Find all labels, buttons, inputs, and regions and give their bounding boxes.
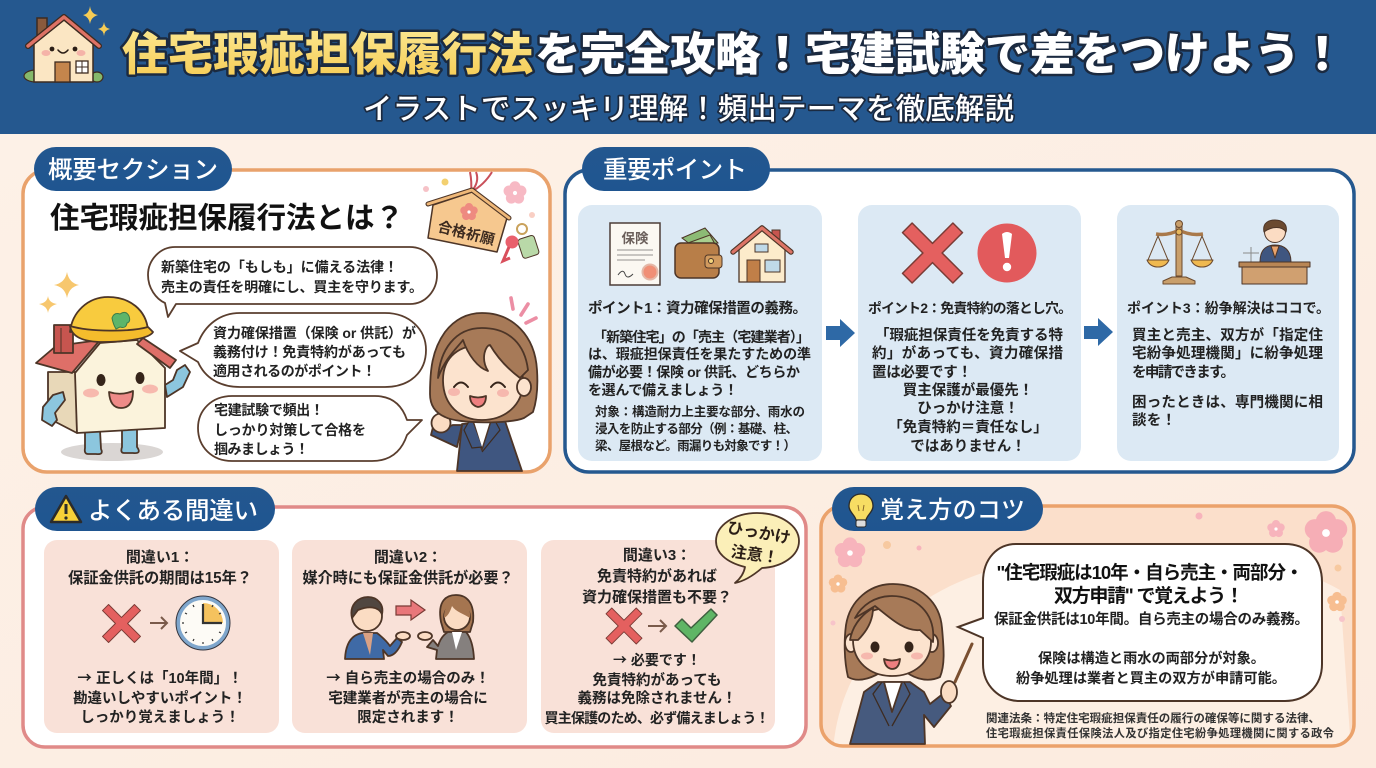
bubble 2: 資力確保措置（保険 or 供託）が [213, 325, 416, 341]
icon: cross to clock [102, 596, 230, 650]
point 3 text: 談を！ [1132, 411, 1176, 429]
speech bubble: 保険は構造と雨水の両部分が対象。 [1038, 650, 1265, 667]
card: mistake 3: 免責特約があれば [597, 567, 717, 585]
bubble 1: 新築住宅の「もしも」に備える法律！ [161, 259, 398, 275]
bubble 3: しっかり対策して合格を [214, 422, 366, 438]
card: mistake 3: 義務は免除されません！ [577, 689, 737, 707]
icon: cross to check [606, 608, 717, 644]
bubble 3: 掴みましょう！ [214, 441, 309, 457]
key points badge: 重要ポイント [603, 156, 747, 184]
card: mistake 1: 保証金供託の期間は15年？ [68, 569, 252, 587]
title: を完全攻略！宅建試験で差をつけよう！ [535, 29, 1345, 80]
character: smiling woman [430, 298, 537, 471]
card: mistake 1: 勘違いしやすいポイント！ [73, 689, 247, 707]
speech bubble: "住宅瑕疵は10年・自ら売主・両部分・ [996, 562, 1304, 583]
point 3 text: 買主と売主、双方が「指定住 [1132, 326, 1324, 344]
card: mistake 3: 買主保護のため、必ず備えましょう！ [544, 710, 770, 726]
related laws note: 住宅瑕疵担保責任保険法人及び指定住宅紛争処理機関に関する政令 [986, 726, 1334, 740]
title: 住宅瑕疵担保履行法 [122, 29, 533, 80]
point 1 text: 備が必要！保険 or 供託、どちらか [588, 364, 800, 380]
icon: scales [1147, 220, 1213, 284]
arrow: point 2 to 3 [1084, 318, 1113, 346]
icon: exclamation [978, 224, 1036, 282]
point 2 text: 「免責特約＝責任なし」 [888, 418, 1048, 436]
panel: key points [565, 147, 1354, 472]
bubble 2: 義務付け！免責特約があっても [213, 344, 406, 360]
character: teacher with pointer [845, 584, 972, 744]
icon: house [733, 228, 791, 282]
card: mistake 2 [292, 540, 527, 733]
overview badge [34, 147, 232, 191]
bubble 1 [148, 247, 437, 317]
point 3 text: ポイント3：紛争解決はココで。 [1127, 300, 1330, 316]
card: mistake 1 [44, 540, 279, 733]
point 1 text: ポイント1：資力確保措置の義務。 [588, 299, 807, 317]
subtitle: イラストでスッキリ理解！頻出テーマを徹底解説 [363, 93, 1014, 126]
related laws note [986, 711, 1334, 740]
point 1 text: 「新築住宅」の「売主（宅建業者）」 [593, 329, 810, 345]
icon: ema wooden plaque [423, 172, 540, 261]
point 3 text [1127, 300, 1330, 429]
callout: tricky note [716, 513, 799, 583]
point 3 text: を申請できます。 [1132, 364, 1235, 381]
bubble 2 [180, 313, 426, 387]
point 1 text: 対象：構造耐力上主要な部分、雨水の [595, 404, 805, 419]
icon: ema wooden plaque: 合格祈願 [436, 217, 497, 249]
point 2 text: 買主保護が最優先！ [903, 381, 1033, 399]
point 1 text: を選んで備えましょう！ [588, 382, 738, 398]
point 2 text: ポイント2：免責特約の落とし穴。 [868, 300, 1072, 316]
point 2 text [868, 300, 1072, 455]
card: mistake 1: → 正しくは「10年間」！ [77, 667, 243, 688]
panel: common mistakes [23, 487, 806, 747]
key points badge [582, 147, 770, 191]
card: point 3 [1117, 205, 1339, 461]
card: mistake 3 [541, 540, 775, 733]
bubble 1: 売主の責任を明確にし、買主を守ります。 [161, 279, 423, 295]
header band [0, 0, 1376, 134]
overview badge: 概要セクション [48, 156, 218, 184]
point 1 text: 梁、屋根など。雨漏りも対象です！） [595, 438, 796, 453]
mistakes badge: よくある間違い [88, 497, 258, 525]
icon: light bulb [849, 494, 873, 527]
icon: agent and client with arrow [345, 595, 474, 659]
card: mistake 3: 免責特約があっても [592, 671, 722, 689]
bubble 3 [198, 396, 422, 461]
memory tips badge [832, 487, 1043, 531]
point 2 text: ではありません！ [910, 438, 1026, 455]
card: mistake 2: 媒介時にも保証金供託が必要？ [302, 569, 514, 587]
card: mistake 3: → 必要です！ [613, 650, 701, 670]
bubble 2: 適用されるのがポイント！ [213, 363, 376, 379]
card: point 1 [578, 205, 822, 461]
character: house with helmet [36, 272, 190, 461]
card: mistake 2: → 自ら売主の場合のみ！ [326, 667, 490, 688]
callout: tricky note: 注意！ [730, 543, 780, 567]
overview heading: 住宅瑕疵担保履行法とは？ [50, 202, 404, 235]
card: mistake 3: 間違い3： [623, 546, 691, 564]
icon: insurance document [610, 223, 660, 285]
related laws note: 関連法条：特定住宅瑕疵担保責任の履行の確保等に関する法律、 [986, 711, 1320, 725]
panel: memory tips [821, 487, 1354, 750]
point 2 text: 置は必要です！ [872, 363, 972, 381]
card: point 2 [858, 205, 1081, 461]
memory tips badge: 覚え方のコツ [880, 497, 1025, 524]
point 2 text: ひっかけ注意！ [917, 399, 1019, 417]
decoration: cherry blossoms [829, 511, 1347, 626]
mistakes badge [35, 487, 275, 531]
card: mistake 2: 宅建業者が売主の場合に [328, 689, 488, 707]
icon: smiling house [24, 6, 110, 82]
callout: tricky note: ひっかけ [726, 519, 792, 547]
card: mistake 2: 限定されます！ [357, 709, 459, 726]
arrow: point 1 to 2 [826, 319, 855, 347]
icon: wallet [675, 228, 722, 278]
icon: warning triangle [51, 496, 81, 522]
bubble 3: 宅建試験で頻出！ [214, 402, 324, 418]
card: mistake 1: しっかり覚えましょう！ [80, 709, 240, 726]
icon: cross [902, 223, 962, 283]
point 2 text: 約」があっても、資力確保措 [872, 344, 1064, 362]
speech bubble: 双方申請" で覚えよう！ [1054, 584, 1244, 607]
card: mistake 3: 資力確保措置も不要？ [582, 588, 732, 606]
speech bubble: 紛争処理は業者と買主の双方が申請可能。 [1016, 670, 1286, 687]
icon: judge at desk [1239, 220, 1310, 284]
point 2 text: 「瑕疵担保責任を免責する特 [875, 326, 1064, 344]
card: mistake 1: 間違い1： [126, 548, 194, 566]
point 1 text [588, 299, 811, 453]
panel: overview [23, 147, 550, 472]
card: mistake 2: 間違い2： [374, 548, 442, 566]
speech bubble: 保証金供託は10年間。自ら売主の場合のみ義務。 [994, 610, 1309, 628]
point 3 text: 困ったときは、専門機関に相 [1132, 393, 1323, 411]
point 1 text: 浸入を防止する部分（例：基礎、柱、 [595, 421, 798, 436]
speech bubble [958, 544, 1322, 701]
point 1 text: は、瑕疵担保責任を果たすための準 [588, 346, 811, 362]
icon: insurance document: 保険 [622, 230, 649, 246]
point 3 text: 宅紛争処理機関」に紛争処理 [1132, 345, 1324, 362]
